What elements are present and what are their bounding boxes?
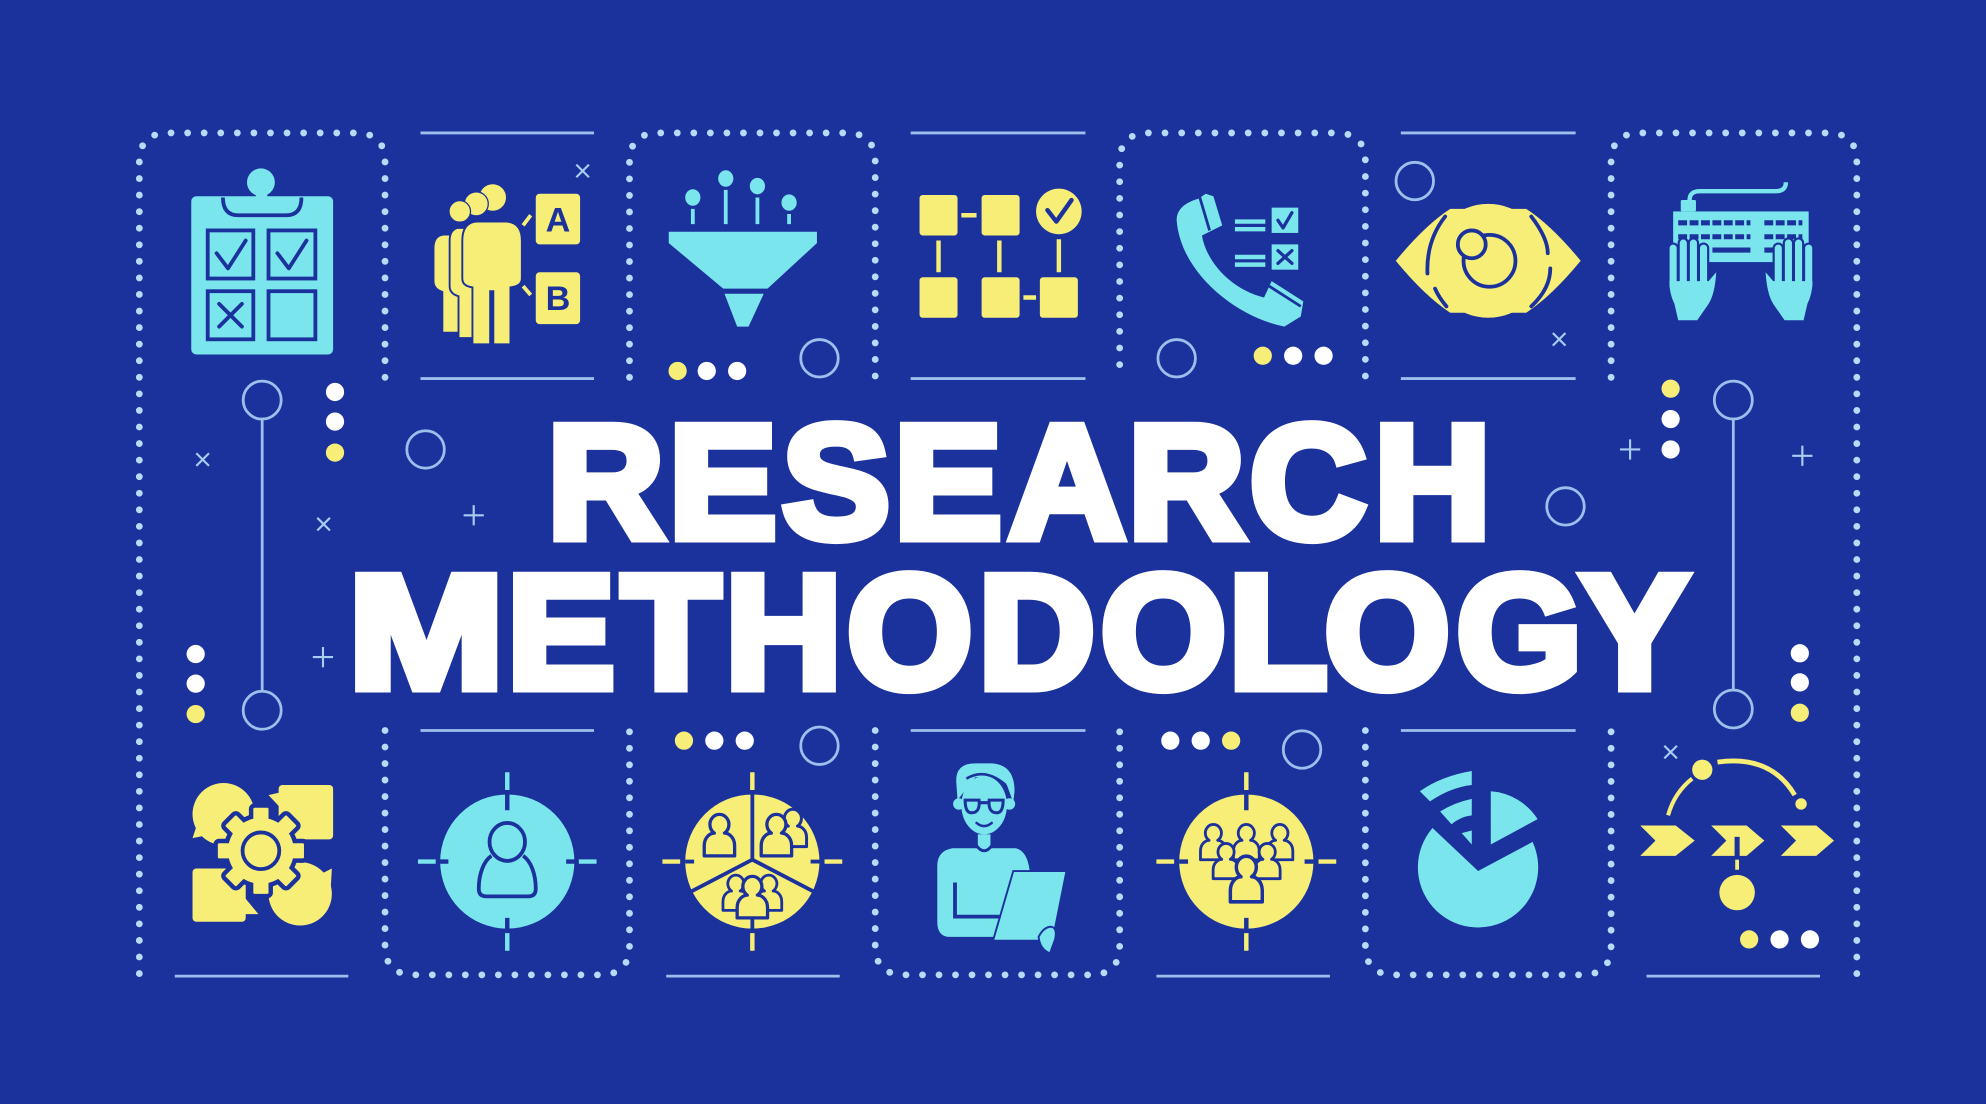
icon: data funnel [669, 170, 817, 327]
title line 2: M [348, 542, 504, 722]
icon: telephone survey [1177, 194, 1303, 327]
icon: segmented groups [662, 772, 842, 951]
decorative circles [407, 162, 1584, 768]
icon: journey path [1640, 760, 1834, 910]
left hand [1669, 243, 1716, 320]
icon: process flowchart [920, 189, 1082, 318]
icon: discussion gear [193, 783, 333, 925]
icon: A/B testing people [434, 184, 580, 344]
letter B: B [546, 280, 570, 318]
icon: pie chart with signal [1418, 771, 1538, 927]
icon: clipboard checklist [191, 168, 333, 354]
left connector [243, 381, 281, 729]
dotted frames [139, 133, 1857, 975]
title line 2: ETHODOLOGY [507, 542, 1688, 722]
letter A: A [546, 202, 570, 240]
title [348, 392, 1688, 722]
title line 1: RESEARCH [548, 392, 1491, 572]
horizontal divider lines [175, 133, 1820, 976]
right hand [1766, 243, 1812, 320]
icon: target individual [418, 772, 597, 951]
decorative cross and plus marks [196, 165, 1812, 758]
right connector [1714, 381, 1752, 728]
icon: hands on keyboard [1669, 182, 1812, 320]
icon: researcher with tablet [937, 763, 1066, 953]
icon: observation eye [1396, 204, 1581, 318]
icon: target crowd [1156, 772, 1336, 951]
decorative dot triplets [187, 347, 1819, 949]
